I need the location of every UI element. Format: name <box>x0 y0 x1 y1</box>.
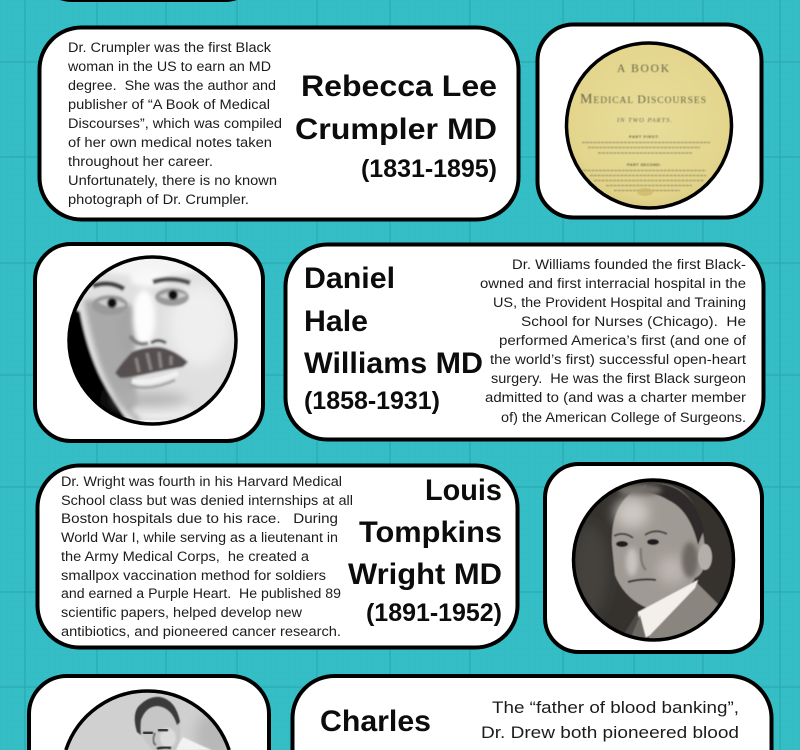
text block: Williams biography: owned and first interracial hospital in the <box>480 276 746 291</box>
text block: Williams biography: School for Nurses (Chicago). He <box>521 314 746 329</box>
text block: Crumpler biography: Discourses”, which was compiled <box>68 116 282 131</box>
panel: Rebecca Lee Crumpler biography <box>40 28 518 220</box>
heading: Daniel Hale Williams MD: (1858-1931) <box>304 387 440 415</box>
icon: book cover, A Book of Medical Discourses: A BOOK <box>617 63 670 75</box>
heading: Rebecca Lee Crumpler MD <box>295 70 497 183</box>
icon: book cover, A Book of Medical Discourses: MEDICAL DISCOURSES <box>580 92 706 107</box>
text block: Drew biography: The “father of blood banking”, <box>492 699 739 717</box>
heading: Louis Tompkins Wright MD: Tompkins <box>359 516 502 549</box>
text block: Wright biography: and earned a Purple Heart. He published 89 <box>61 586 341 601</box>
panel: Charles Drew biography <box>292 676 772 750</box>
text block: Crumpler biography: of her own medical notes taken <box>68 135 272 150</box>
text block: Drew biography: Dr. Drew both pioneered blood <box>481 724 739 742</box>
text block: Crumpler biography: throughout her career. <box>68 154 213 169</box>
heading: Louis Tompkins Wright MD: Louis <box>425 474 502 507</box>
text block: Crumpler biography <box>67 40 282 207</box>
panel: Louis Tompkins Wright image card <box>545 464 762 652</box>
text block: Williams biography: performed America’s first (and one of <box>499 333 746 348</box>
panel: book cover image card <box>538 24 762 218</box>
panel: Louis Tompkins Wright biography <box>38 466 518 648</box>
icon: book cover, A Book of Medical Discourses <box>560 40 740 215</box>
text block: Crumpler biography: publisher of “A Book of Medical <box>68 97 270 112</box>
icon: portrait of Dr. Drew <box>60 688 235 750</box>
text block: Crumpler biography: Dr. Crumpler was the first Black <box>68 40 271 55</box>
icon: book cover, A Book of Medical Discourses: PART SECOND: <box>627 162 661 167</box>
text block: Wright biography <box>61 474 353 639</box>
panel: Daniel Hale Williams biography <box>286 244 764 440</box>
text block: Wright biography: Boston hospitals due to his race. During <box>61 511 338 526</box>
text block: Wright biography: antibiotics, and pioneered cancer research. <box>61 624 341 639</box>
icon: book cover, A Book of Medical Discourses: PART FIRST: <box>629 134 659 139</box>
panel: Daniel Hale Williams image card <box>35 244 263 441</box>
heading: Louis Tompkins Wright MD: (1891-1952) <box>366 599 502 627</box>
text block: Crumpler biography: Unfortunately, there is no known <box>68 173 277 188</box>
heading: Daniel Hale Williams MD: Williams MD <box>304 347 483 380</box>
previous card bottom edge <box>60 0 237 2</box>
heading: Rebecca Lee Crumpler MD: Crumpler MD <box>295 113 497 146</box>
icon: portrait of Dr. Wright <box>570 478 740 645</box>
text block: Crumpler biography: woman in the US to earn an MD <box>67 59 271 74</box>
text block: Williams biography: the world’s first) successful open-heart <box>490 352 746 367</box>
text block: Williams biography: surgery. He was the first Black surgeon <box>491 371 746 386</box>
text block: Wright biography: smallpox vaccination method for soldiers <box>61 568 326 583</box>
text block: Williams biography: admitted to (and was a charter member <box>485 390 747 405</box>
text block: Williams biography: Dr. Williams founded the first Black- <box>512 257 746 272</box>
text block: Williams biography: US, the Provident Hospital and Training <box>493 295 746 310</box>
heading: Daniel Hale Williams MD: Hale <box>304 305 368 338</box>
text block: Drew biography <box>481 699 739 742</box>
heading: Rebecca Lee Crumpler MD: Rebecca Lee <box>301 70 497 103</box>
heading: Louis Tompkins Wright MD <box>348 474 502 627</box>
text block: Williams biography <box>480 257 747 425</box>
text block: Crumpler biography: photograph of Dr. Crumpler. <box>68 192 249 207</box>
heading: Charles: Charles <box>320 705 431 738</box>
text block: Wright biography: the Army Medical Corps, he created a <box>61 549 310 564</box>
text block: Wright biography: Dr. Wright was fourth in his Harvard Medical <box>61 474 342 489</box>
icon: portrait of Dr. Williams <box>67 255 238 426</box>
text block: Wright biography: School class but was denied internships at all <box>61 493 353 508</box>
heading: Daniel Hale Williams MD: Daniel <box>304 262 395 295</box>
heading: Louis Tompkins Wright MD: Wright MD <box>348 558 502 591</box>
icon: book cover, A Book of Medical Discourses: IN TWO PARTS. <box>616 117 672 124</box>
heading: Rebecca Lee Crumpler MD: (1831-1895) <box>361 155 497 183</box>
panel: Charles Drew image card <box>29 676 269 750</box>
text block: Crumpler biography: degree. She was the author and <box>68 78 276 93</box>
text block: Wright biography: scientific papers, helped develop new <box>61 605 302 620</box>
heading: Daniel Hale Williams MD <box>304 262 483 415</box>
text block: Wright biography: World War I, while serving as a lieutenant in <box>61 530 338 545</box>
text block: Williams biography: of) the American College of Surgeons. <box>501 410 746 425</box>
